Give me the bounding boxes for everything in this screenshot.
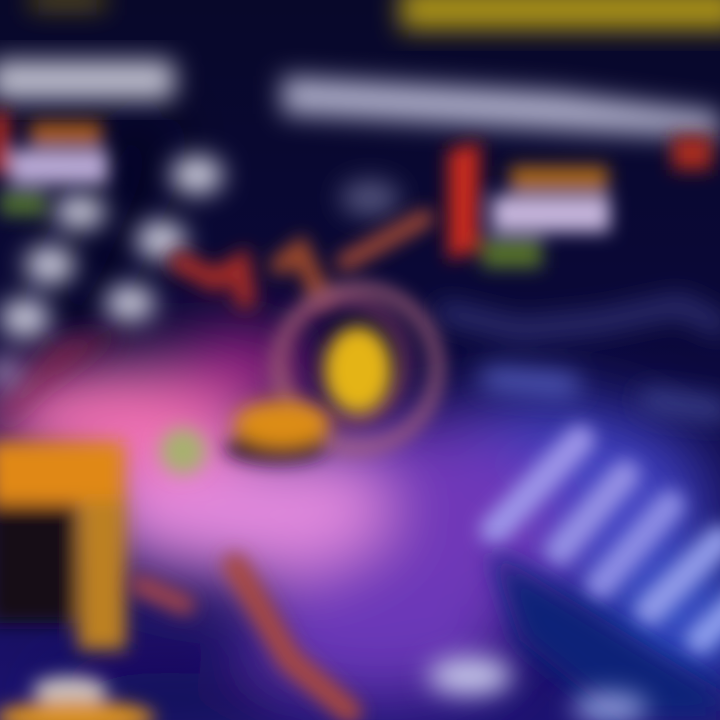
- background nebula: [0, 332, 720, 720]
- icon: centre flag: [448, 136, 712, 268]
- icon: orange rocket body: [225, 401, 330, 462]
- icon: yellow coin: [324, 326, 392, 414]
- panel: dark blue block: [490, 550, 720, 720]
- panel: orange box: [0, 442, 126, 650]
- line chart: right faint text rows: [445, 305, 720, 410]
- data points: white dots: [0, 156, 400, 386]
- red nebula edge: [0, 330, 120, 430]
- heading: left: [0, 60, 175, 100]
- icon: green circle: [160, 428, 206, 474]
- arrow: rising red line: [180, 218, 425, 298]
- icon: left flag: [0, 112, 108, 216]
- bar chart: lavender diagonal stripes: [495, 440, 720, 640]
- arrow: falling orange line: [140, 565, 350, 712]
- dark diagonal band: [40, 110, 170, 340]
- icon: target ring: [277, 288, 437, 448]
- top yellow banner: [30, 0, 720, 30]
- icon: bottom orange dome: [0, 676, 155, 720]
- heading: right: [282, 76, 720, 138]
- icon: bottom white blob: [428, 657, 648, 720]
